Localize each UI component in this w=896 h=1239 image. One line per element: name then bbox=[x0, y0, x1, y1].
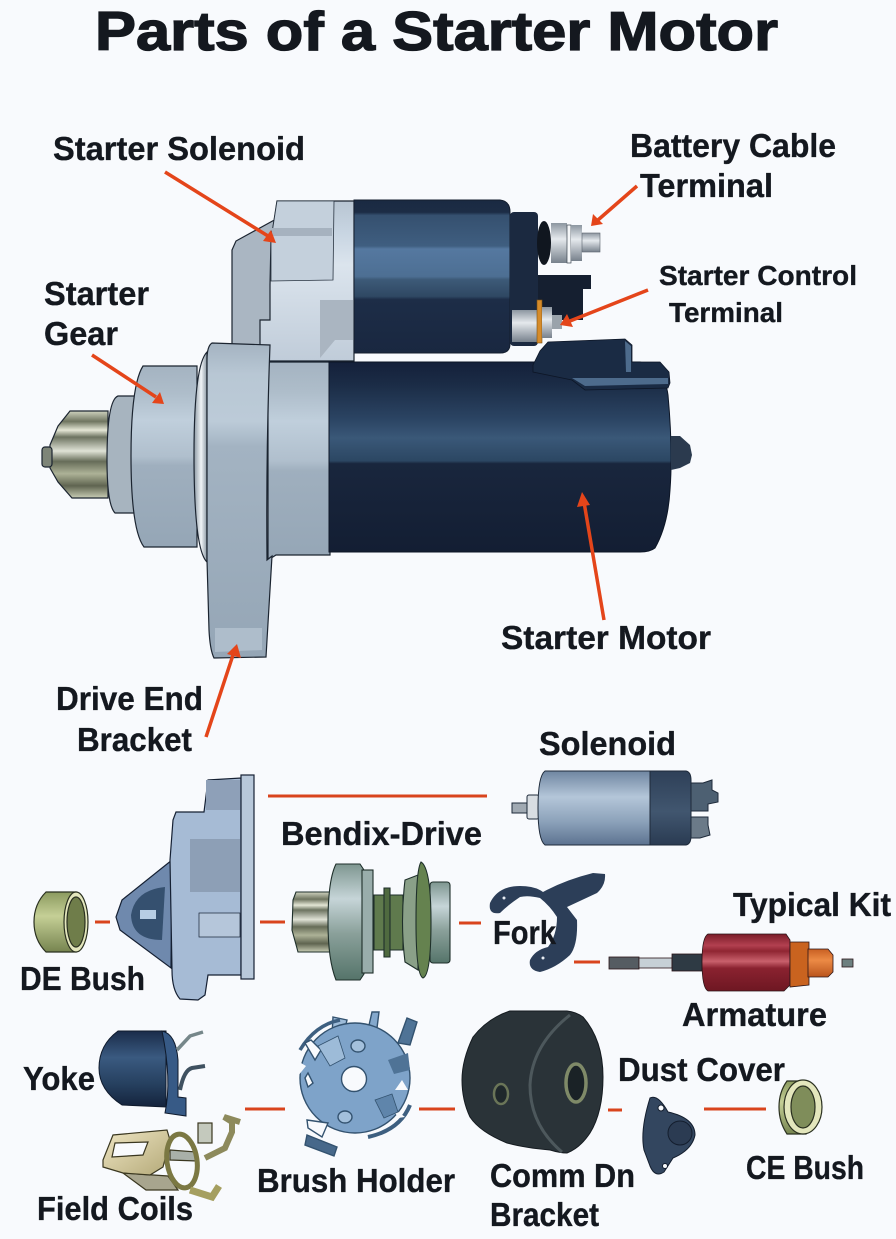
bendix drive part bbox=[292, 862, 450, 980]
starter motor cylinder bbox=[329, 362, 671, 552]
arrow: starter gear bbox=[92, 355, 164, 404]
label: drive end bracket bbox=[56, 680, 203, 758]
CE bush part bbox=[779, 1080, 822, 1134]
label: typical kit: Typical Kit bbox=[733, 886, 891, 923]
exploded parts illustrations bbox=[34, 771, 853, 1197]
brush holder part bbox=[296, 1012, 417, 1156]
label: fork: Fork bbox=[493, 914, 557, 951]
label: battery cable terminal: Battery Cable bbox=[630, 127, 836, 164]
drive end bracket part bbox=[116, 775, 254, 1000]
yoke part bbox=[99, 1031, 205, 1116]
DE bush part bbox=[34, 892, 88, 952]
fork part bbox=[490, 873, 605, 972]
label: battery cable terminal: Terminal bbox=[640, 167, 773, 204]
starter solenoid housing bbox=[232, 201, 354, 361]
armature part bbox=[609, 934, 853, 991]
label: yoke: Yoke bbox=[23, 1060, 95, 1097]
solenoid end cap bbox=[510, 212, 538, 346]
label: comm dn bracket: Comm Dn bbox=[490, 1157, 635, 1194]
label: comm dn bracket bbox=[490, 1157, 635, 1233]
arrow: drive end bracket bbox=[206, 644, 241, 737]
label: starter gear: Gear bbox=[44, 315, 118, 352]
label: field coils: Field Coils bbox=[37, 1190, 193, 1227]
arrow: starter control terminal bbox=[560, 290, 648, 327]
label: solenoid: Solenoid bbox=[539, 725, 676, 762]
label: battery cable terminal bbox=[630, 127, 836, 204]
label: starter solenoid: Starter Solenoid bbox=[53, 130, 305, 167]
arrow: starter solenoid bbox=[165, 172, 276, 243]
dust cover part bbox=[643, 1097, 695, 1174]
label: CE bush: CE Bush bbox=[746, 1149, 864, 1186]
label: starter control terminal: Starter Control bbox=[659, 260, 857, 291]
arrow: battery cable terminal bbox=[591, 186, 637, 226]
drive end nose and pinion bbox=[42, 343, 330, 658]
connector block bbox=[538, 275, 591, 320]
label: bendix-drive: Bendix-Drive bbox=[281, 815, 482, 852]
label: comm dn bracket: Bracket bbox=[490, 1196, 599, 1233]
label: starter gear bbox=[44, 275, 149, 352]
solenoid part bbox=[512, 771, 718, 845]
label: starter control terminal: Terminal bbox=[669, 297, 783, 328]
solenoid body cylinder bbox=[354, 200, 510, 353]
motor rear bolt bbox=[671, 436, 692, 470]
connector lines between parts bbox=[95, 796, 766, 1110]
motor top cover bbox=[533, 339, 670, 390]
label: starter control terminal bbox=[659, 260, 857, 328]
label: armature: Armature bbox=[682, 996, 827, 1033]
comm end bracket part bbox=[462, 1011, 603, 1153]
leader arrows bbox=[92, 172, 648, 737]
label: starter motor: Starter Motor bbox=[501, 619, 711, 656]
label: dust cover: Dust Cover bbox=[618, 1051, 785, 1088]
label: drive end bracket: Bracket bbox=[77, 721, 192, 758]
arrow: starter motor bbox=[577, 492, 604, 620]
field coils part bbox=[103, 1117, 240, 1197]
title: Parts of a Starter Motor bbox=[95, 0, 778, 62]
starter control terminal bbox=[512, 300, 562, 343]
label: brush holder: Brush Holder bbox=[257, 1162, 455, 1199]
label: starter gear: Starter bbox=[44, 275, 149, 312]
label: DE bush: DE Bush bbox=[20, 960, 145, 997]
battery cable terminal post bbox=[537, 221, 600, 265]
label: drive end bracket: Drive End bbox=[56, 680, 203, 717]
assembled starter motor illustration bbox=[42, 200, 692, 658]
